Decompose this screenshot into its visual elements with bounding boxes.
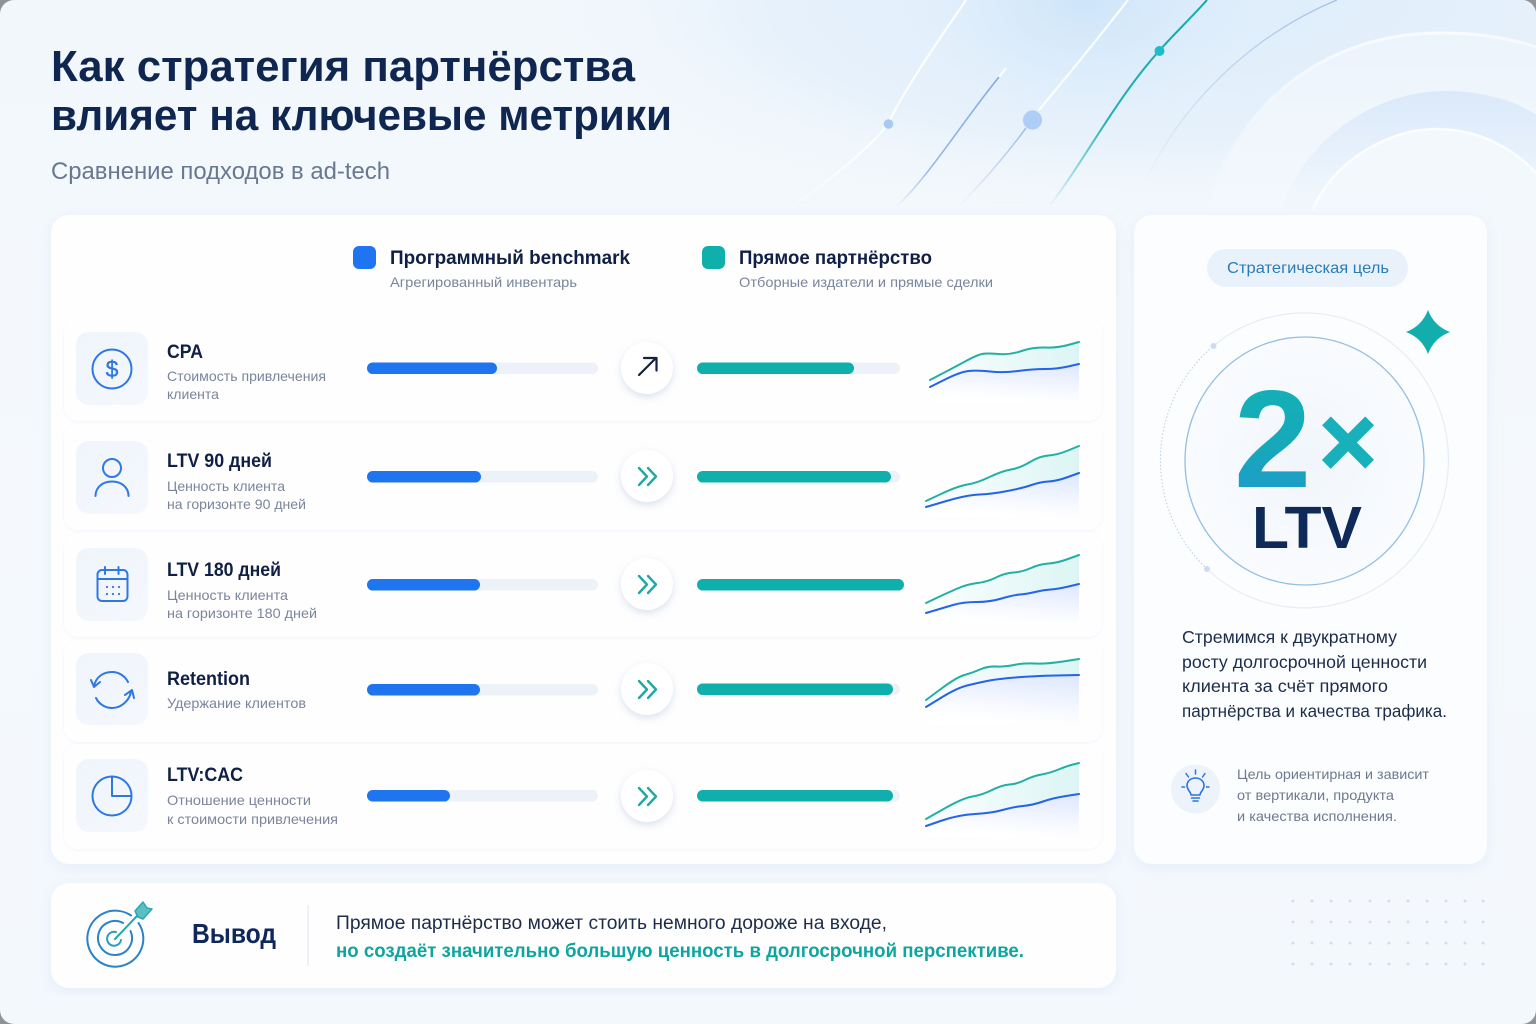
panel: metric comparison: [51, 215, 1116, 864]
bar: benchmark: [367, 362, 598, 374]
icon: user: [76, 441, 148, 514]
panel: conclusion: [51, 883, 1116, 988]
goal description: росту долгосрочной ценности: [1182, 652, 1427, 672]
icon: dollar: [76, 332, 148, 405]
goal description: партнёрства и качества трафика.: [1182, 701, 1447, 721]
legend: direct partnership: Отборные издатели и прямые сделки: [739, 274, 993, 290]
decorative dot grid: [1292, 900, 1484, 966]
legend: programmatic benchmark: Программный benchmark: [390, 248, 630, 269]
metric text: Ценность клиента: [167, 478, 285, 494]
metric text: Отношение ценности: [167, 792, 311, 808]
conclusion text: но создаёт значительно большую ценность в долгосрочной перспективе.: [336, 941, 1024, 962]
sparkline: [929, 341, 1080, 392]
metric text: к стоимости привлечения: [167, 811, 338, 827]
legend: programmatic benchmark: [353, 246, 630, 290]
metric text: Удержание клиентов: [167, 695, 306, 711]
row: Retention: [69, 653, 1097, 742]
metric text: LTV 180 дней: [167, 560, 281, 581]
panel: strategic goal: [1134, 215, 1487, 864]
bar: benchmark: [367, 790, 598, 802]
arrow badge: double chevron: [621, 558, 673, 610]
icon: pie chart: [76, 759, 148, 832]
goal note: от вертикали, продукта: [1237, 787, 1394, 803]
row: CPA: [69, 332, 1097, 422]
metric text: [168, 344, 325, 399]
metric text: [167, 765, 338, 827]
row: LTV 180: [69, 548, 1097, 638]
sparkline: [926, 763, 1079, 837]
background decoration: curves and arcs: [790, 0, 1536, 212]
sparkline: [925, 445, 1080, 508]
conclusion text: [336, 913, 1024, 962]
title: Как стратегия партнёрства: [51, 42, 636, 91]
legend: direct partnership: Прямое партнёрство: [739, 248, 932, 269]
metric text: на горизонте 90 дней: [167, 496, 306, 512]
metric text: [167, 451, 306, 512]
bar: partnership: [697, 579, 904, 590]
bar: partnership: [697, 471, 900, 482]
row: LTV 90: [69, 441, 1097, 530]
metric text: LTV 90 дней: [167, 451, 272, 472]
metric text: LTV:CAC: [167, 765, 243, 786]
icon: dollar: $: [106, 356, 119, 382]
sparkline: [925, 658, 1080, 710]
goal description: [1182, 627, 1447, 721]
subtitle: Сравнение подходов в ad-tech: [51, 158, 390, 185]
bar: partnership: [697, 362, 900, 374]
row: LTV:CAC: [69, 759, 1097, 850]
bar: partnership: [697, 684, 900, 695]
metric text: [167, 669, 306, 711]
bar: benchmark: [367, 579, 598, 590]
icon: refresh: [76, 653, 148, 725]
arrow badge: double chevron: [621, 663, 673, 715]
bar: benchmark: [367, 684, 598, 696]
icon: light bulb: [1171, 764, 1220, 814]
metric text: CPA: [167, 342, 203, 363]
metric text: Стоимость привлечения: [167, 368, 326, 384]
goal note: и качества исполнения.: [1237, 808, 1397, 824]
goal badge: 2x LTV: 2: [1234, 362, 1311, 517]
pill: strategic goal: Стратегическая цель: [1227, 260, 1389, 277]
goal note: [1237, 766, 1430, 824]
goal badge: 2x LTV: LTV: [1252, 495, 1362, 561]
goal badge: 2x LTV: ×: [1319, 386, 1377, 498]
icon: sparkle: [1406, 310, 1450, 354]
icon: target with arrow: [87, 902, 152, 967]
conclusion heading: Вывод: [192, 918, 276, 949]
legend: direct partnership: [702, 246, 993, 290]
metric text: [167, 560, 317, 621]
arrow badge: double chevron: [621, 770, 673, 822]
bar: benchmark: [367, 471, 598, 482]
sparkline: [925, 554, 1080, 614]
metric text: Ценность клиента: [167, 587, 288, 603]
legend: programmatic benchmark: Агрегированный инвентарь: [390, 274, 577, 290]
title: влияет на ключевые метрики: [51, 91, 672, 140]
goal description: Стремимся к двукратному: [1182, 627, 1397, 647]
title: [54, 50, 670, 139]
conclusion text: Прямое партнёрство может стоить немного дороже на входе,: [336, 913, 887, 934]
goal badge: 2x LTV: [1160, 313, 1448, 608]
arrow badge: double chevron: [621, 450, 673, 502]
metric text: клиента: [167, 386, 219, 402]
goal description: клиента за счёт прямого: [1182, 676, 1388, 696]
metric text: на горизонте 180 дней: [167, 605, 317, 621]
arrow badge: up right: [621, 342, 673, 394]
goal note: Цель ориентирная и зависит: [1237, 766, 1430, 782]
bar: partnership: [697, 790, 900, 802]
icon: calendar: [76, 548, 148, 621]
pill: strategic goal: [1207, 249, 1408, 287]
metric text: Retention: [167, 669, 250, 690]
